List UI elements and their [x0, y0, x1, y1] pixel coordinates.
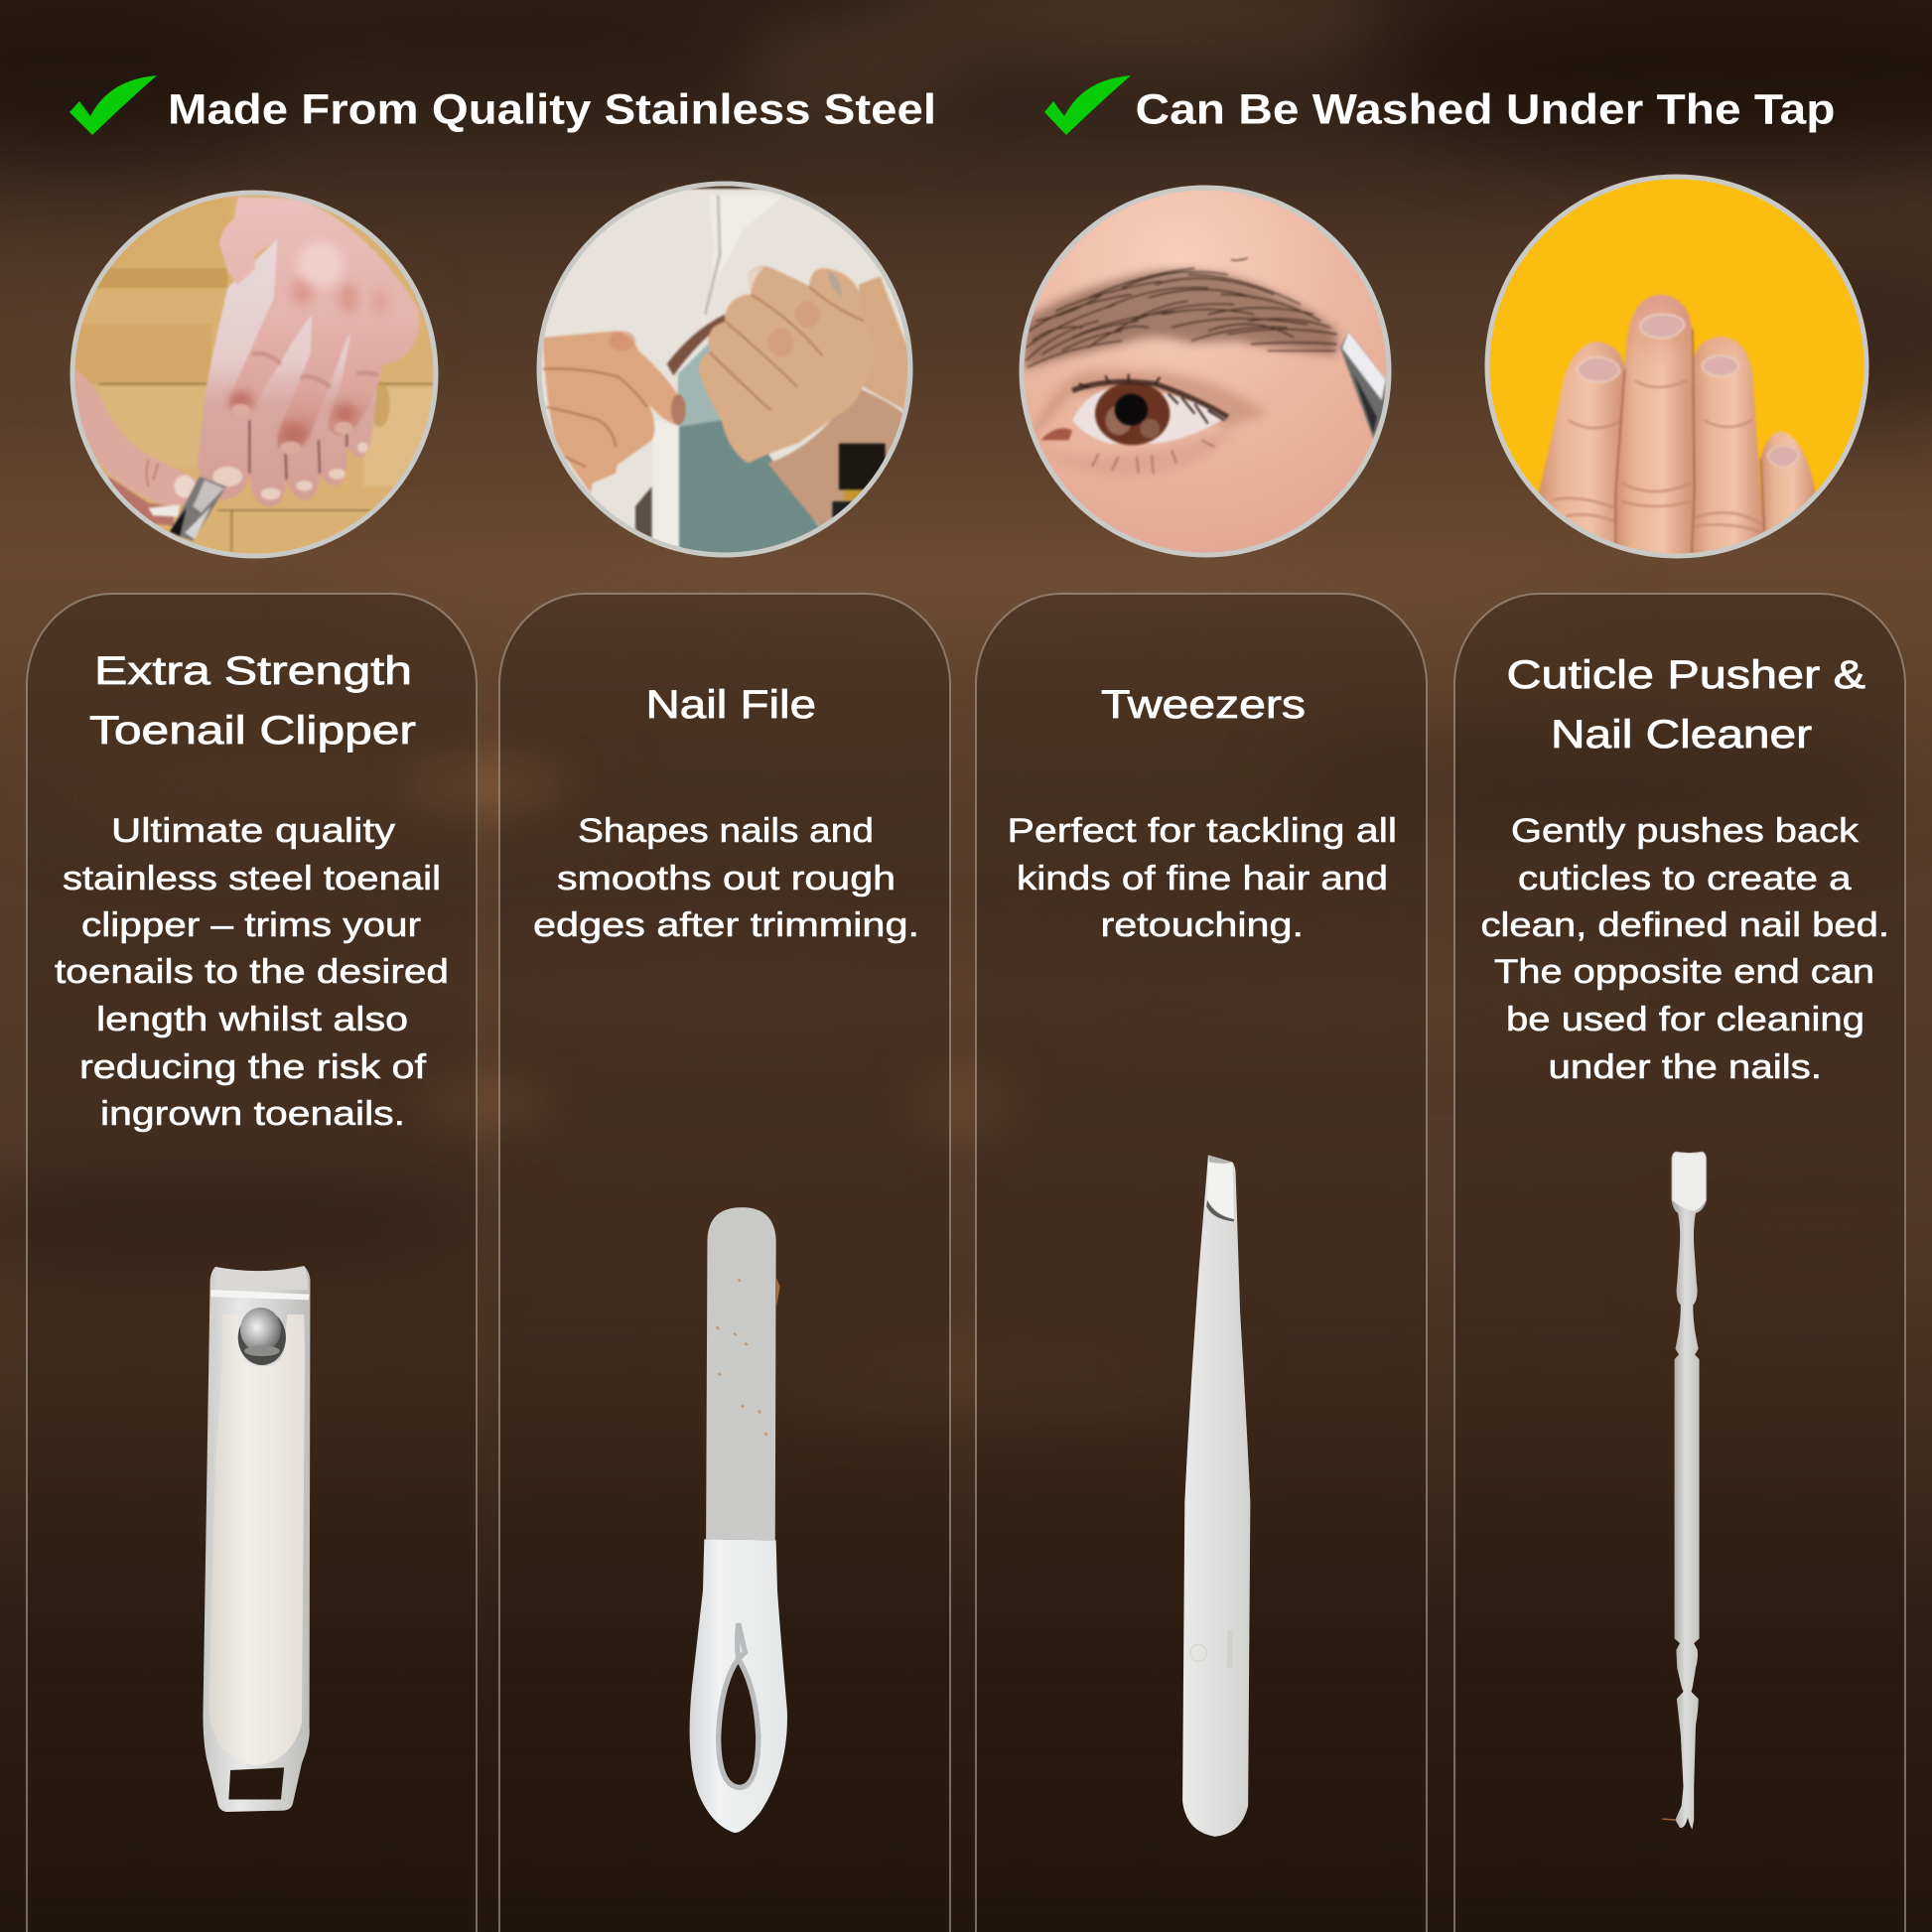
- title: cuticle pusher and nail cleaner: Cuticle Pusher &: [1507, 653, 1865, 697]
- title: extra strength toenail clipper: Extra Strength: [94, 649, 412, 693]
- description: tweezers: [1007, 812, 1397, 944]
- description: nail file: smooths out rough: [557, 860, 896, 897]
- check mark: washable: [1044, 75, 1131, 135]
- description: toenail clipper: reducing the risk of: [79, 1048, 427, 1086]
- description: toenail clipper: length whilst also: [96, 1001, 408, 1038]
- heading: can be washed under the tap: Can Be Washed Under The Tap: [1136, 85, 1835, 133]
- description: tweezers: kinds of fine hair and: [1017, 860, 1388, 897]
- tool: nail file: [690, 1207, 787, 1833]
- tool: tweezers: [1182, 1155, 1250, 1837]
- description: cuticle pusher and nail cleaner: [1481, 812, 1889, 1086]
- panel: nail file: [499, 594, 950, 1932]
- description: cuticle pusher and nail cleaner: clean, defined nail bed.: [1481, 906, 1889, 944]
- description: toenail clipper: clipper – trims your: [81, 906, 421, 944]
- photo: clipping toenails: [66, 189, 443, 561]
- description: cuticle pusher and nail cleaner: cuticles to create a: [1518, 860, 1852, 897]
- tool: nail clipper: [203, 1266, 310, 1812]
- title: cuticle pusher and nail cleaner: [1507, 653, 1865, 757]
- description: toenail clipper: stainless steel toenail: [63, 860, 441, 897]
- photo: filing a nail: [536, 184, 913, 556]
- description: toenail clipper: [55, 812, 449, 1133]
- description: cuticle pusher and nail cleaner: Gently pushes back: [1511, 812, 1860, 850]
- photo: clean fingernails on yellow: [1479, 174, 1876, 561]
- panel: cuticle pusher and nail cleaner: [1454, 594, 1905, 1932]
- description: nail file: [533, 812, 919, 944]
- description: tweezers: retouching.: [1100, 906, 1304, 944]
- tool: cuticle pusher: [1663, 1152, 1707, 1830]
- description: toenail clipper: Ultimate quality: [111, 812, 395, 850]
- panel: toenail clipper: [27, 594, 477, 1932]
- check mark: stainless steel: [69, 75, 157, 135]
- description: toenail clipper: toenails to the desired: [55, 953, 449, 991]
- description: toenail clipper: ingrown toenails.: [100, 1095, 405, 1133]
- description: cuticle pusher and nail cleaner: The opposite end can: [1494, 953, 1874, 991]
- title: extra strength toenail clipper: [89, 649, 416, 753]
- panel: tweezers: [976, 594, 1427, 1932]
- description: cuticle pusher and nail cleaner: under the nails.: [1549, 1048, 1822, 1086]
- title: extra strength toenail clipper: Toenail Clipper: [89, 709, 416, 753]
- description: tweezers: Perfect for tackling all: [1007, 812, 1397, 850]
- heading: made from quality stainless steel: Made From Quality Stainless Steel: [168, 85, 936, 133]
- description: nail file: Shapes nails and: [578, 812, 874, 850]
- title: nail file: Nail File: [645, 683, 816, 727]
- title: cuticle pusher and nail cleaner: Nail Cleaner: [1551, 713, 1812, 757]
- title: tweezers: Tweezers: [1101, 683, 1306, 727]
- description: nail file: edges after trimming.: [533, 906, 919, 944]
- photo: tweezing an eyebrow: [1022, 188, 1390, 556]
- description: cuticle pusher and nail cleaner: be used for cleaning: [1506, 1001, 1864, 1038]
